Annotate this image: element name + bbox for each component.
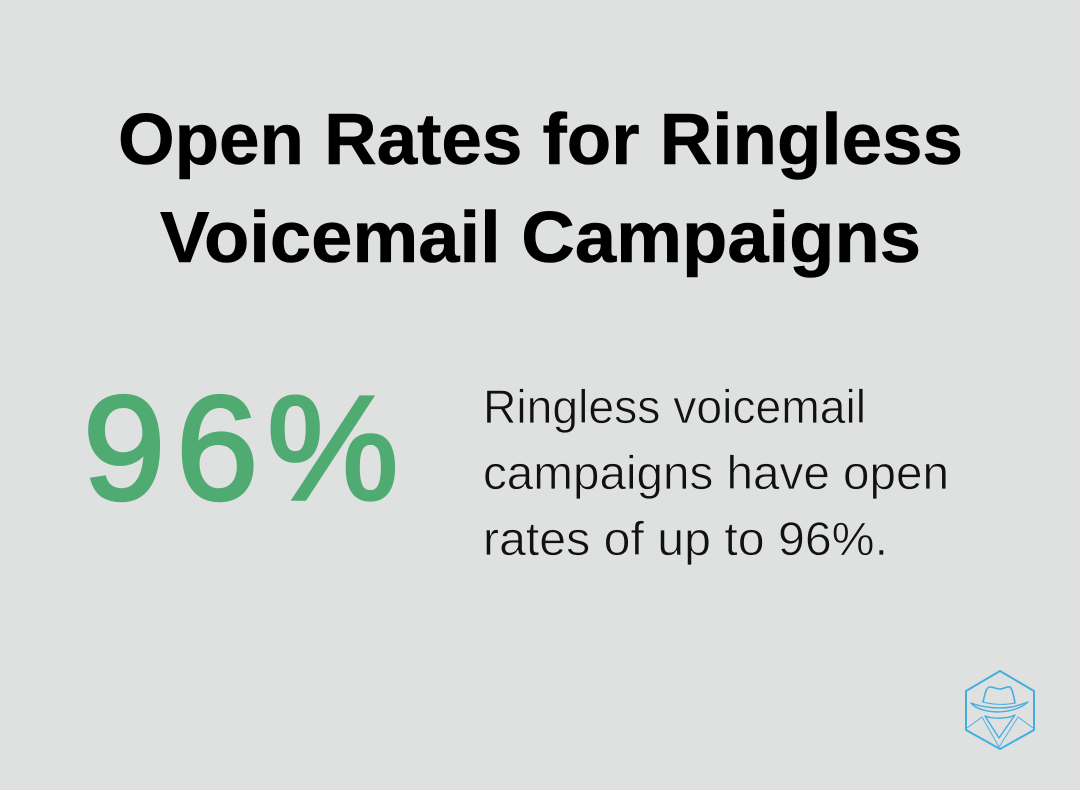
icon: hexagon spy logo <box>966 671 1034 749</box>
big stat: 96%: 96% <box>83 366 399 531</box>
description text <box>483 380 949 565</box>
description text: rates of up to 96%. <box>483 512 888 565</box>
description text: campaigns have open <box>483 446 949 499</box>
title: Voicemail Campaigns <box>160 198 921 278</box>
title <box>118 100 963 278</box>
title: Open Rates for Ringless <box>118 100 963 180</box>
description text: Ringless voicemail <box>483 380 866 433</box>
